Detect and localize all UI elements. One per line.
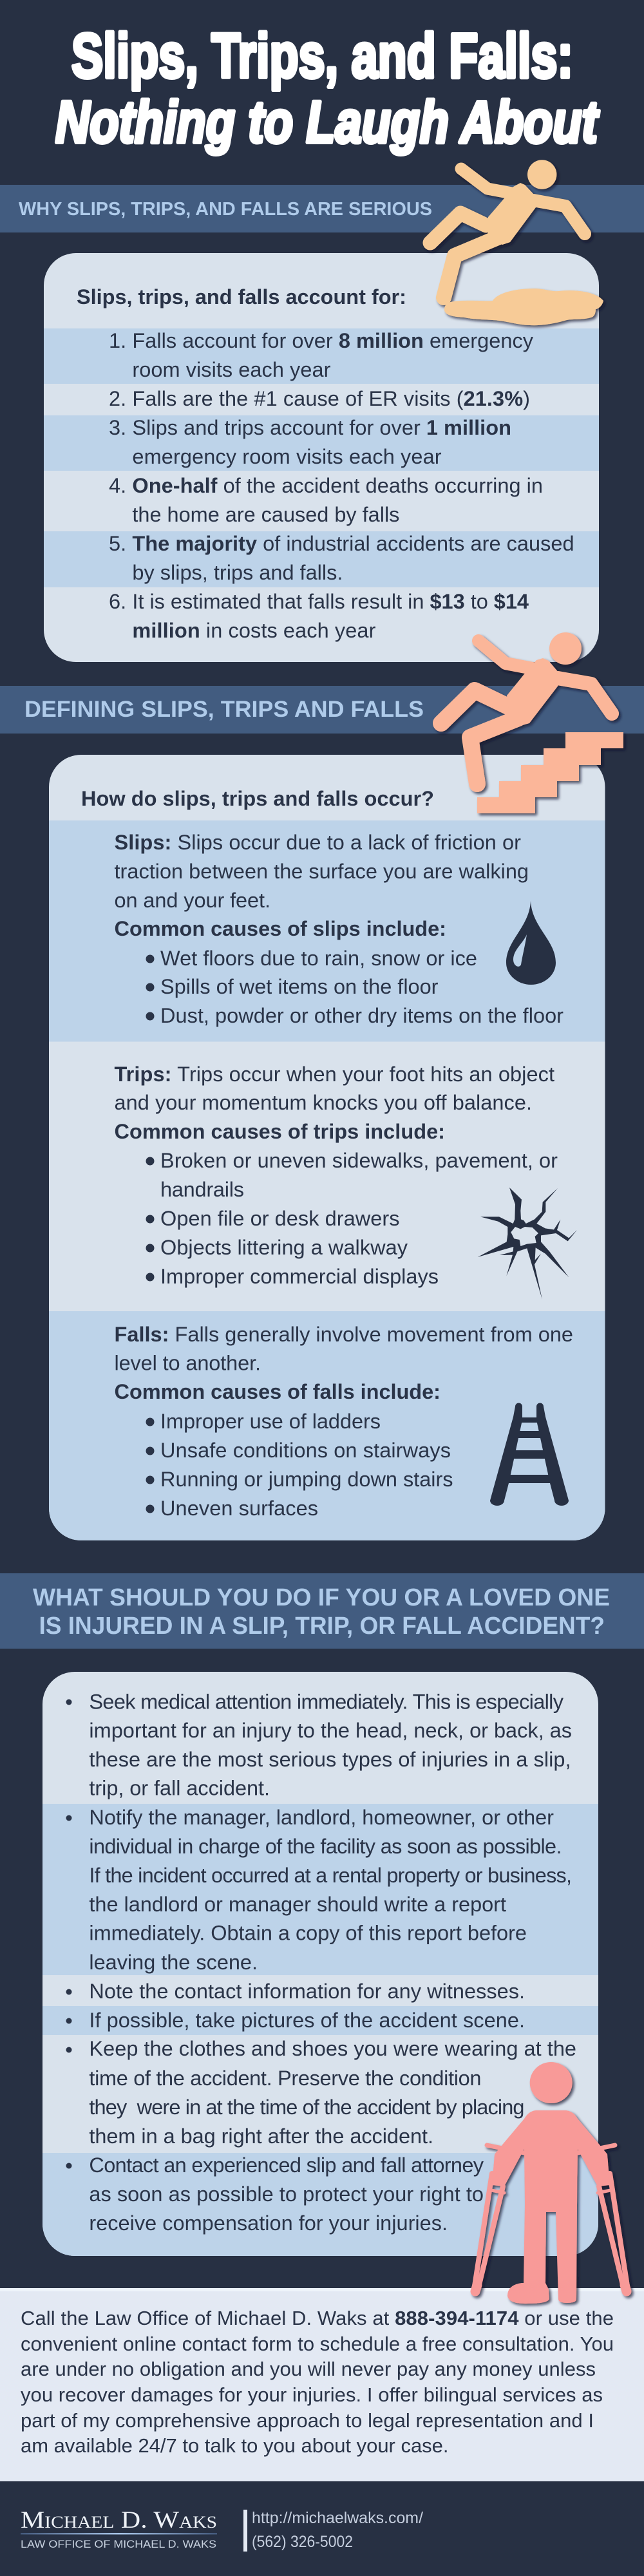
banner: defining slips, trips and falls: DEFINING SLIPS, TRIPS AND FALLS: [24, 697, 424, 722]
step: note witnesses: Note the contact information for any witnesses.: [89, 1980, 525, 2003]
statistics list: 1.: [109, 329, 126, 352]
statistics list: One-half of the accident deaths occurring in: [132, 474, 543, 497]
statistics list: by slips, trips and falls.: [132, 561, 343, 584]
icon: falling figure on stairs: [441, 632, 623, 813]
icon: slipping figure on puddle: [430, 160, 603, 325]
step: notify the manager: Notify the manager, landlord, homeowner, or other: [89, 1806, 554, 1829]
footer: law office logo: [21, 2507, 217, 2550]
right crutch: [578, 2145, 628, 2291]
panel: contact call to action: are under no obligation and you will never pay any money unless: [21, 2358, 596, 2380]
text block: falls: level to another.: [115, 1351, 261, 1374]
statistics list: 4.: [109, 474, 126, 497]
icon: water drop: [506, 901, 556, 985]
text block: trips: [115, 1063, 558, 1288]
step: seek medical attention: important for an injury to the head, neck, or back, as: [89, 1719, 572, 1742]
text block: trips: Objects littering a walkway: [160, 1236, 408, 1259]
left crutch: [474, 2145, 524, 2291]
icon: person on crutches: [474, 2062, 628, 2304]
banner: why slips, trips, and falls are serious: WHY SLIPS, TRIPS, AND FALLS ARE SERIOUS: [19, 199, 432, 220]
body and arms: [492, 2110, 610, 2304]
icon: ladder: [490, 1403, 569, 1506]
banner: what should you do if injured: WHAT SHOULD YOU DO IF YOU OR A LOVED ONE: [33, 1584, 610, 1611]
text block: trips: Open file or desk drawers: [160, 1207, 399, 1230]
step: take pictures: If possible, take pictures of the accident scene.: [89, 2009, 525, 2032]
statistics list: million in costs each year: [132, 619, 376, 642]
panel: contact call to action: [0, 2288, 644, 2481]
footer: contact details: (562) 326-5002: [252, 2533, 353, 2551]
text block: trips: Common causes of trips include:: [115, 1120, 445, 1143]
panel: steps after an injury: [43, 1672, 599, 2256]
banner: why slips, trips, and falls are serious: [0, 185, 644, 232]
step: contact an attorney: [66, 2154, 484, 2235]
panel: contact call to action: Call the Law Office of Michael D. Waks at 888-394-1174 or use the: [21, 2307, 614, 2329]
panel: contact call to action: you recover damages for your injuries. I offer bilingual services as: [21, 2383, 603, 2406]
step: keep the clothes and shoes: time of the accident. Preserve the condition: [89, 2067, 481, 2090]
text block: slips: Slips: Slips occur due to a lack of friction or: [115, 831, 521, 854]
panel: contact call to action: convenient online contact form to schedule a free consultation. You: [21, 2333, 614, 2355]
step: notify the manager: individual in charge of the facility as soon as possible.: [89, 1835, 562, 1858]
statistics list: Slips and trips account for over 1 million: [132, 416, 511, 439]
step: contact an attorney: as soon as possible to protect your right to: [89, 2183, 484, 2206]
step: notify the manager: [66, 1806, 572, 1974]
panel: contact call to action: part of my comprehensive approach to legal representation and I: [21, 2409, 594, 2432]
text block: falls: Running or jumping down stairs: [160, 1468, 453, 1491]
text block: trips: Improper commercial displays: [160, 1265, 439, 1288]
text block: slips: Common causes of slips include:: [115, 917, 446, 940]
footer: law office logo: LAW OFFICE OF MICHAEL D. WAKS: [21, 2538, 216, 2550]
heading: how do slips, trips and falls occur: How do slips, trips and falls occur?: [81, 787, 434, 810]
statistics list: Falls are the #1 cause of ER visits (21.3%): [132, 387, 530, 410]
statistics list: It is estimated that falls result in $13 to $14: [132, 590, 529, 613]
icon: crack: [478, 1188, 577, 1300]
banner: what should you do if injured: [0, 1573, 644, 1649]
text block: falls: Uneven surfaces: [160, 1497, 318, 1520]
step: keep the clothes and shoes: Keep the clothes and shoes you were wearing at the: [89, 2037, 576, 2060]
text block: slips: [115, 831, 564, 1027]
heading: slips, trips, and falls account for: Slips, trips, and falls account for:: [77, 285, 406, 308]
text block: slips: Dust, powder or other dry items on the floor: [160, 1004, 564, 1027]
text block: falls: Common causes of falls include:: [115, 1380, 440, 1403]
statistics list: 2.: [109, 387, 126, 410]
statistics list: 5.: [109, 532, 126, 555]
statistics list: Falls account for over 8 million emergency: [132, 329, 534, 352]
text block: falls: Improper use of ladders: [160, 1410, 381, 1433]
statistics list: The majority of industrial accidents are caused: [132, 532, 574, 555]
text block: trips: handrails: [160, 1178, 244, 1201]
step: notify the manager: If the incident occurred at a rental property or business,: [89, 1864, 572, 1887]
title: [55, 21, 600, 155]
step: seek medical attention: Seek medical attention immediately. This is especially: [89, 1690, 564, 1713]
panel: statistics card: [44, 253, 599, 662]
statistics list: the home are caused by falls: [132, 503, 399, 526]
step: keep the clothes and shoes: them in a bag right after the accident.: [89, 2125, 433, 2148]
step: notify the manager: leaving the scene.: [89, 1951, 258, 1974]
step: seek medical attention: [66, 1690, 572, 1799]
step: seek medical attention: these are the most serious types of injuries in a slip,: [89, 1748, 571, 1771]
statistics list: emergency room visits each year: [132, 445, 442, 468]
step: keep the clothes and shoes: [66, 2037, 576, 2148]
banner: defining slips, trips and falls: [0, 686, 644, 734]
text block: slips: Wet floors due to rain, snow or ice: [160, 947, 477, 970]
statistics list: 6.: [109, 590, 126, 613]
footer: law office logo: Michael D. Waks: [21, 2507, 217, 2533]
text block: slips: on and your feet.: [115, 889, 270, 912]
panel: contact call to action: am available 24/7 to talk to you about your case.: [21, 2434, 448, 2457]
text block: falls: [115, 1323, 573, 1520]
statistics list: [109, 329, 574, 642]
step: notify the manager: the landlord or manager should write a report: [89, 1893, 506, 1916]
text block: trips: Broken or uneven sidewalks, pavement, or: [160, 1149, 558, 1172]
text block: falls: Unsafe conditions on stairways: [160, 1439, 451, 1462]
banner: what should you do if injured: IS INJURED IN A SLIP, TRIP, OR FALL ACCIDENT?: [39, 1613, 605, 1640]
text block: slips: traction between the surface you are walking: [115, 860, 529, 883]
text block: trips: Trips: Trips occur when your foot hits an object: [115, 1063, 554, 1086]
footer: contact details: http://michaelwaks.com/: [252, 2509, 423, 2527]
panel: how slips, trips and falls occur: [49, 755, 605, 1540]
step: keep the clothes and shoes: they were in at the time of the accident by placing: [89, 2096, 524, 2119]
footer: contact details: [243, 2509, 423, 2552]
step: seek medical attention: trip, or fall accident.: [89, 1776, 270, 1799]
statistics list: 3.: [109, 416, 126, 439]
step: contact an attorney: receive compensation for your injuries.: [89, 2211, 448, 2235]
step: notify the manager: immediately. Obtain a copy of this report before: [89, 1922, 527, 1945]
step: contact an attorney: Contact an experienced slip and fall attorney: [89, 2154, 484, 2177]
statistics list: room visits each year: [132, 358, 331, 381]
text block: trips: and your momentum knocks you off balance.: [115, 1091, 532, 1114]
text block: slips: Spills of wet items on the floor: [160, 975, 439, 998]
text block: falls: Falls: Falls generally involve movement from one: [115, 1323, 573, 1346]
